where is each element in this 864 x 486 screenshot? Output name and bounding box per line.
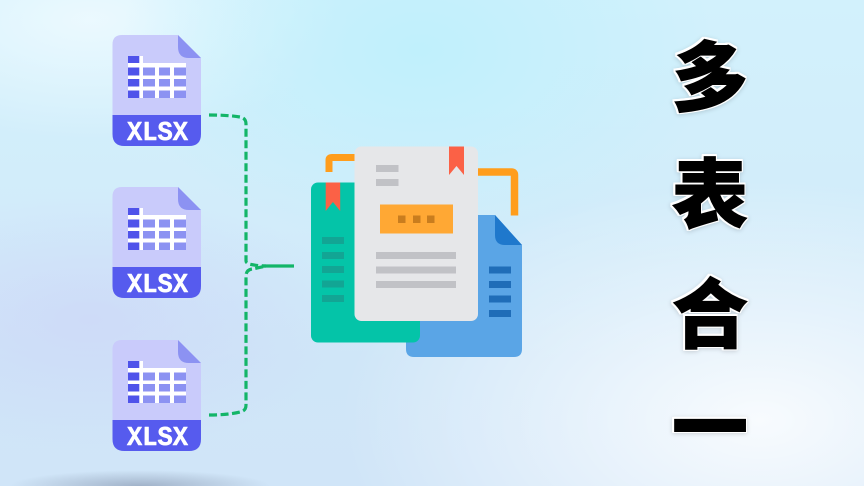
title: vertical heading: 合: [672, 274, 748, 359]
title: vertical heading: 表: [672, 154, 748, 239]
icon: XLSX file top: [112, 35, 201, 149]
icon: XLSX file middle: [112, 187, 201, 301]
icon: merged documents: [311, 146, 522, 357]
icon: XLSX file bottom: [112, 340, 201, 454]
icon: XLSX file middle: XLSX: [127, 271, 189, 301]
blue document: [406, 215, 522, 357]
icon: XLSX file bottom: XLSX: [127, 424, 189, 454]
orange bracket left: [329, 158, 356, 172]
grey document: [354, 146, 478, 321]
title: vertical heading: 一: [672, 387, 748, 472]
icon: XLSX file top: XLSX: [127, 119, 189, 149]
title: vertical heading: 多: [672, 37, 748, 122]
title: vertical heading: [672, 37, 748, 472]
green document: [311, 182, 420, 342]
orange bracket right: [478, 172, 514, 216]
bracket: dashed green connector: [209, 115, 294, 415]
